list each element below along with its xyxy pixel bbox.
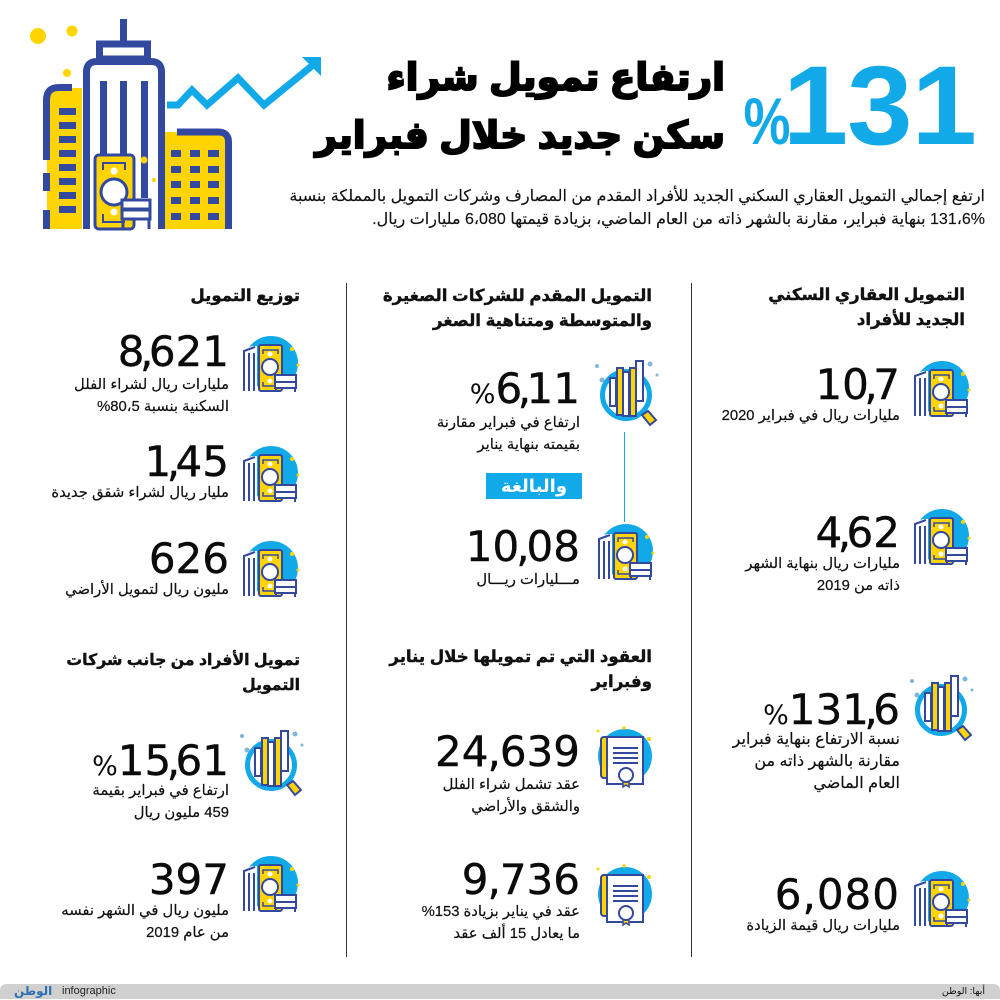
stat: 9,736 contracts	[422, 855, 652, 942]
stat: 4.62 billion: ذاته من 2019	[817, 578, 900, 594]
title: سكن جديد خلال فبراير	[315, 114, 725, 156]
heading: تمويل الأفراد من جانب شركات	[66, 652, 300, 669]
stat: 10.08 billion: 10,08	[466, 522, 580, 571]
stat: 626 million: 626	[149, 534, 229, 583]
heading: توزيع التمويل	[190, 286, 300, 305]
stat: 8,621 billion: 8,621	[118, 327, 229, 376]
infographic label: infographic	[62, 985, 116, 997]
stat: 8,621 billion: السكنية بنسبة 80،5%	[97, 399, 229, 415]
stat: 131.6 percent: نسبة الارتفاع بنهاية فبراير	[733, 731, 900, 748]
stat: 1.45 billion	[51, 437, 300, 502]
stat: 6.11 percent: ارتفاع في فبراير مقارنة	[437, 415, 580, 431]
heading: التمويل	[242, 677, 300, 694]
intro paragraph: 131،6% بنهاية فبراير، مقارنة بالشهر ذاته من العام الماضي، بزيادة قيمتها 6،080 مليارات ريال.	[372, 211, 985, 228]
stat: 626 million: مليون ريال لتمويل الأراضي	[65, 582, 229, 598]
brand logo: الوطن	[14, 984, 52, 998]
stat: 24,639 contracts: 24,639	[435, 727, 580, 776]
panel: financing for small and medium enterprises and contracts	[383, 286, 658, 942]
stat: 626 million	[65, 534, 300, 598]
stat: 131.6 percent: مقارنة بالشهر ذاته من	[754, 753, 900, 770]
connector line	[624, 432, 625, 522]
headline number: 131%: %	[744, 84, 790, 158]
stat: 10.08 billion: مـــليارات ريـــال	[476, 572, 580, 588]
stat: 397 million	[61, 855, 300, 941]
stat: 9,736 contracts: عقد في يناير بزيادة 153%	[422, 904, 580, 920]
heading	[388, 647, 652, 692]
stat: 131.6 percent	[732, 675, 974, 792]
panel: financing distribution and finance companies	[51, 286, 304, 941]
stat: 10.7 billion	[722, 360, 970, 424]
stat: 8,621 billion: مليارات ريال لشراء الفلل	[74, 377, 229, 393]
stat: 6,080 billion	[746, 870, 970, 934]
stat: 131.6 percent: العام الماضي	[813, 775, 900, 792]
heading: العقود التي تم تمويلها خلال يناير	[389, 647, 652, 666]
stat: 6,080 billion: مليارات ريال قيمة الزيادة	[746, 918, 900, 934]
illustration: city skyline with rising arrow	[30, 19, 321, 230]
stat: 4.62 billion	[744, 508, 970, 594]
stat: 6.11 percent: بقيمته بنهاية يناير	[477, 437, 580, 453]
title: ارتفاع تمويل شراء	[386, 56, 725, 98]
heading: الجديد للأفراد	[857, 310, 965, 329]
stat: 15.61 percent: %15,61	[92, 736, 229, 785]
stat: 397 million: من عام 2019	[146, 925, 229, 941]
heading	[383, 286, 652, 330]
intro paragraph: ارتفع إجمالي التمويل العقاري السكني الجديد للأفراد المقدم من المصارف وشركات التمويل بالمملكة بنسبة	[289, 188, 985, 205]
intro paragraph	[289, 185, 985, 228]
heading: التمويل العقاري السكني	[768, 285, 965, 304]
heading: وفبراير	[591, 672, 652, 691]
stat: 8,621 billion	[74, 327, 300, 415]
heading	[66, 650, 300, 694]
stat: 10.7 billion: مليارات ريال في فبراير 2020	[722, 408, 900, 424]
stat: 397 million: مليون ريال في الشهر نفسه	[61, 903, 229, 919]
stat: 4.62 billion: مليارات ريال بنهاية الشهر	[745, 556, 900, 572]
divider line	[346, 283, 347, 957]
badge: amounting to	[486, 473, 582, 499]
heading	[768, 285, 965, 330]
stat: 6.11 percent: %6,11	[470, 364, 580, 413]
stat: 24,639 contracts	[435, 726, 652, 815]
stat: 131.6 percent: %131,6	[763, 685, 900, 734]
source: أبها: الوطن	[942, 986, 985, 997]
footer bar	[0, 984, 1000, 999]
heading: التمويل المقدم للشركات الصغيرة	[383, 286, 652, 305]
panel: new residential financing for individuals	[722, 285, 974, 934]
title	[312, 56, 725, 158]
stat: 6.11 percent	[437, 360, 658, 453]
stat: 9,736 contracts: ما يعادل 15 ألف عقد	[454, 926, 580, 942]
stat: 24,639 contracts: والشقق والأراضي	[471, 799, 580, 815]
stat: 6,080 billion: 6,080	[775, 870, 900, 919]
heading: والمتوسطة ومتناهية الصغر	[433, 311, 652, 330]
stat: 1.45 billion: 1,45	[144, 437, 229, 486]
stat: 15.61 percent	[92, 730, 304, 821]
divider line	[691, 283, 692, 957]
stat: 397 million: 397	[149, 855, 229, 904]
badge: amounting to: والبالغة	[501, 476, 567, 496]
stat: 4.62 billion: 4,62	[815, 508, 900, 557]
stat: 10.08 billion	[466, 522, 654, 588]
stat: 15.61 percent: 459 مليون ريال	[134, 805, 229, 821]
stat: 9,736 contracts: 9,736	[462, 855, 580, 904]
stat: 24,639 contracts: عقد تشمل شراء الفلل	[443, 777, 580, 793]
stat: 1.45 billion: مليار ريال لشراء شقق جديدة	[51, 485, 229, 501]
headline number: 131%: 131	[783, 43, 976, 168]
stat: 15.61 percent: ارتفاع في فبراير بقيمة	[92, 783, 229, 799]
stat: 10.7 billion: 10,7	[815, 360, 900, 409]
